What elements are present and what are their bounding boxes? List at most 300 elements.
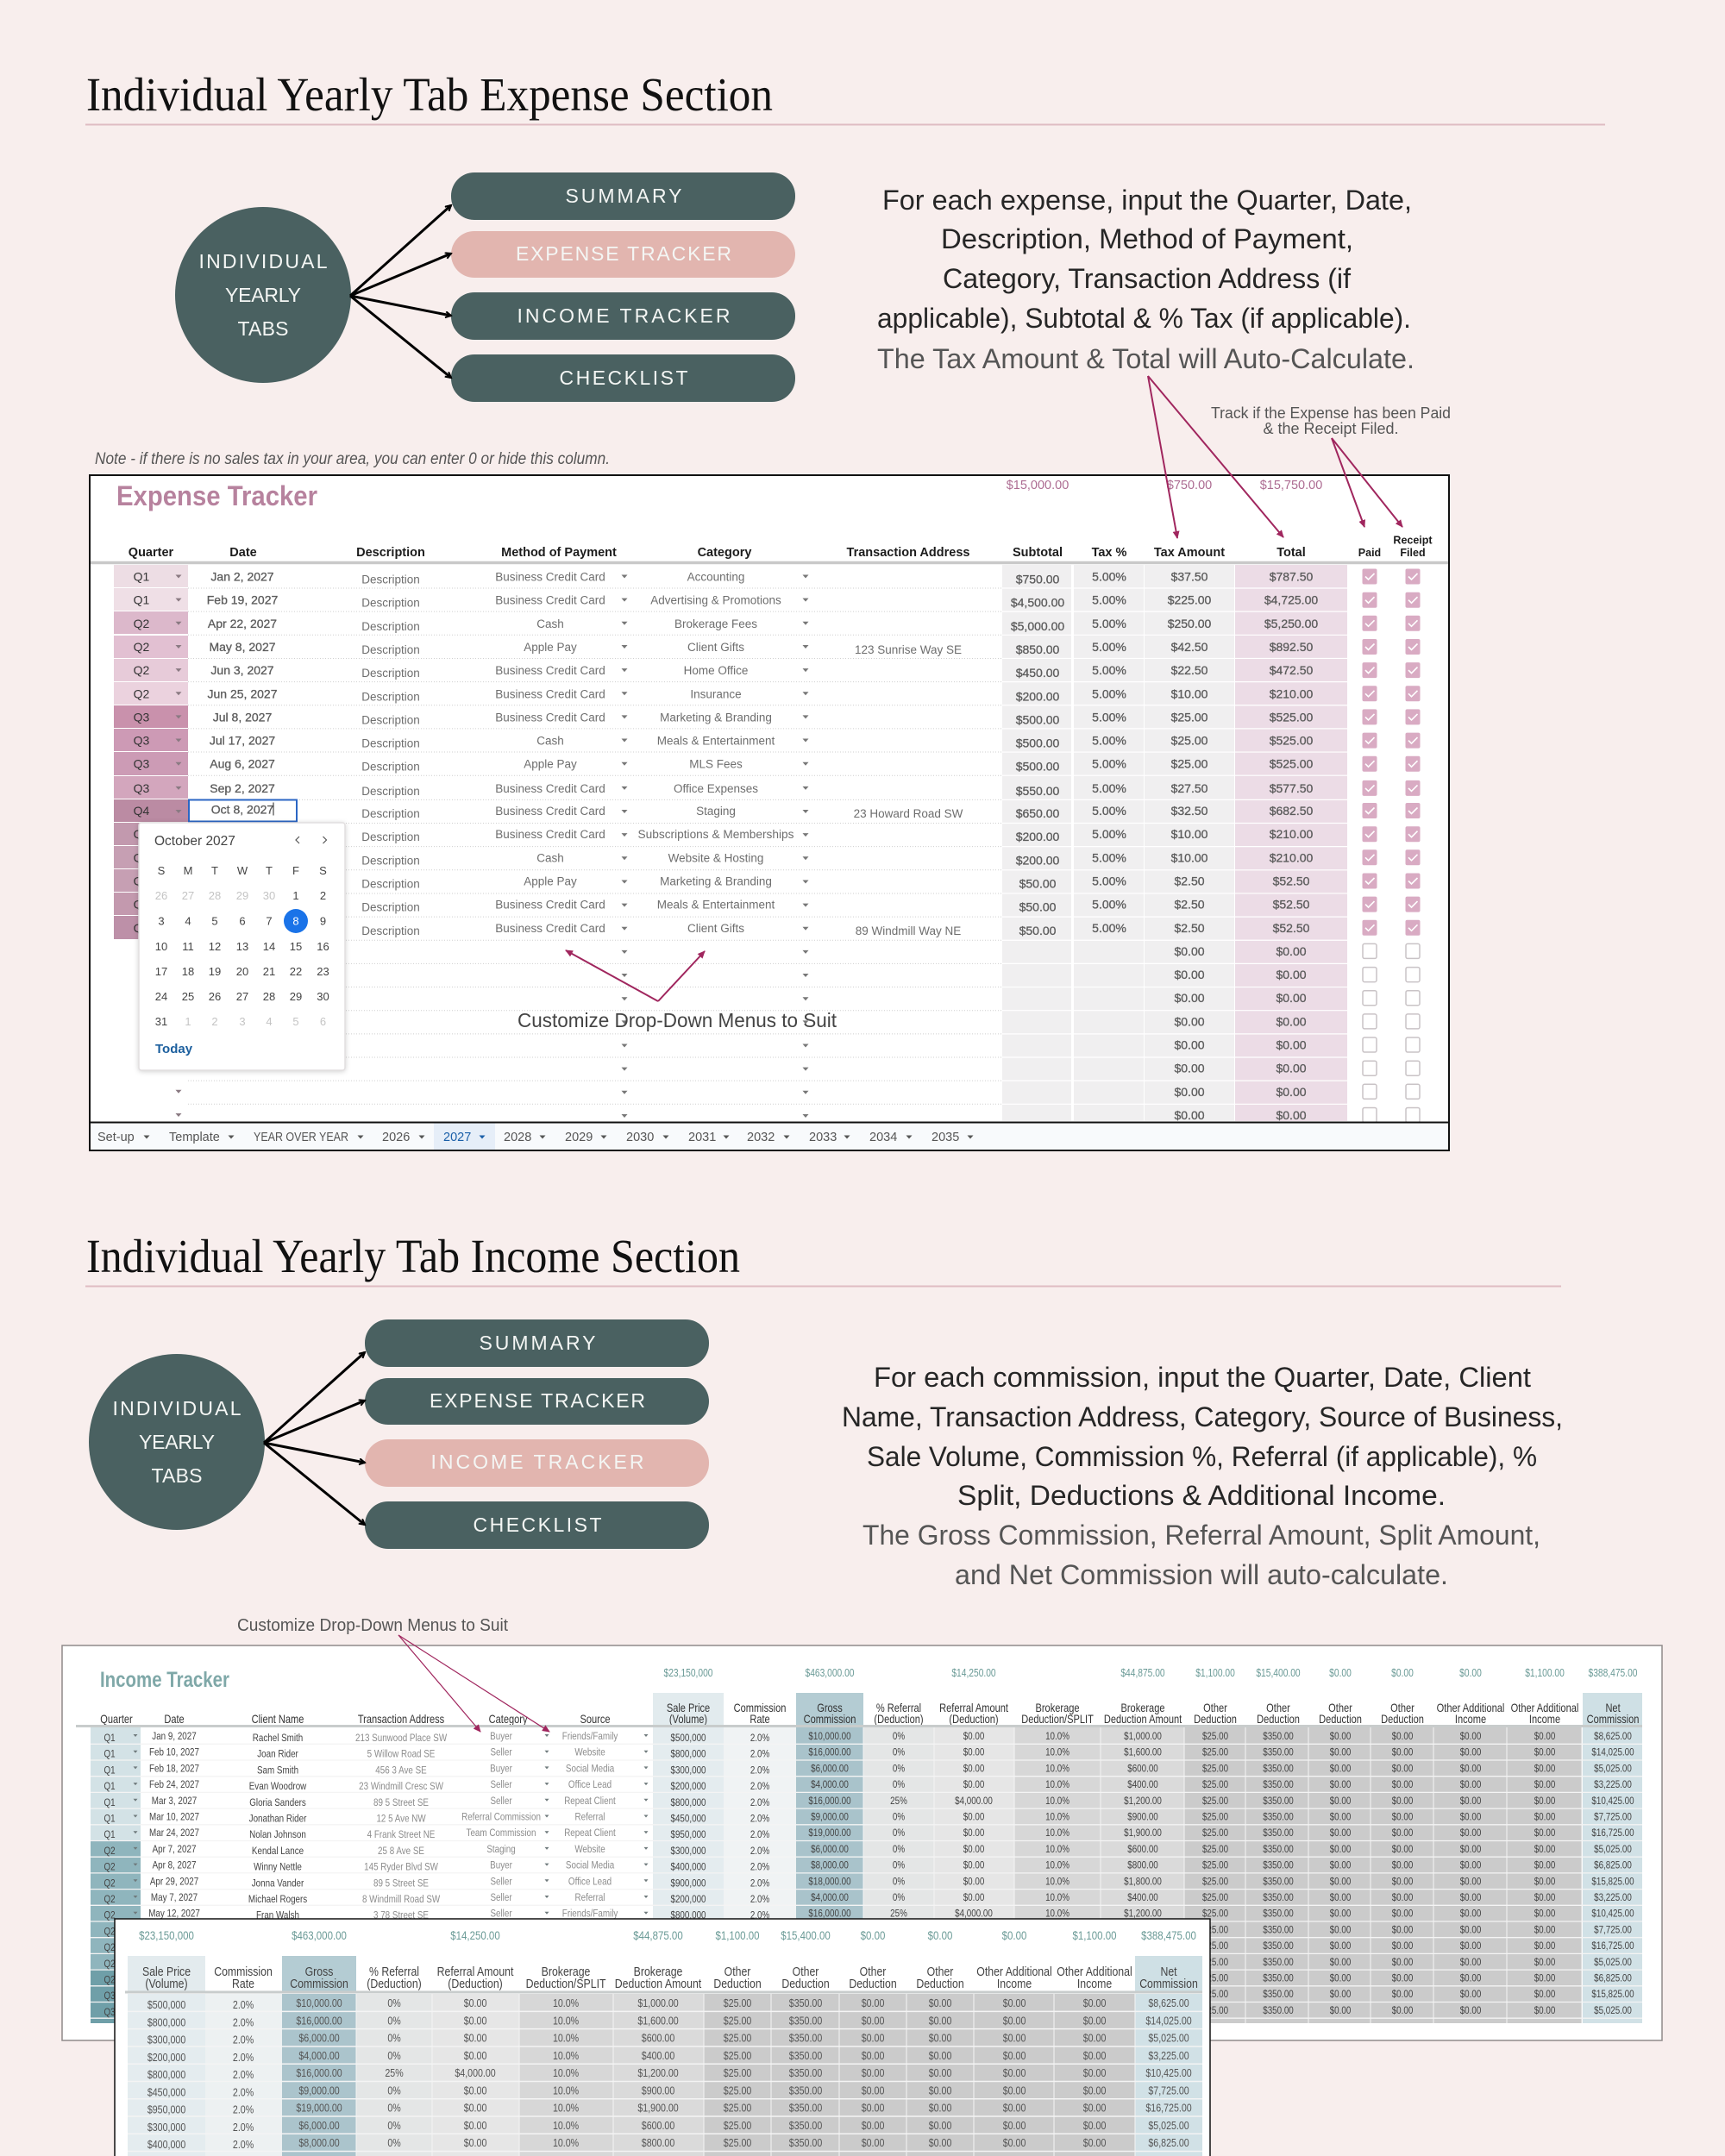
title: expense tracker: Expense Tracker <box>116 480 317 511</box>
column: other deduction 4: $0.00 <box>929 2014 952 2028</box>
header row: Subtotal <box>1013 546 1063 560</box>
column: net commission: $10,425.00 <box>1591 1796 1634 1807</box>
column: other deduction 2: $350.00 <box>1263 1973 1294 1984</box>
column: tax percent: 5.00% <box>1092 663 1126 677</box>
column: sale price: $500,000 <box>670 1733 706 1744</box>
column: other deduction 3: $0.00 <box>1330 1940 1351 1952</box>
totals row: $15,400.00 <box>781 1928 831 1942</box>
column: commission rate <box>233 1998 254 2151</box>
column: brokerage deduction amount: $400.00 <box>642 2049 675 2062</box>
column: other additional income 1: $0.00 <box>1003 2102 1026 2115</box>
column: other deduction 2: $350.00 <box>1263 1892 1294 1903</box>
column: quarter: Q4 <box>134 898 150 912</box>
column: transaction address: 456 3 Ave SE <box>375 1765 427 1777</box>
column: category: Subscriptions & Memberships <box>638 828 794 841</box>
column: gross commission: $16,000.00 <box>808 1747 851 1758</box>
column: transaction address: 89 5 Street SE <box>373 1877 429 1890</box>
column: total: $0.00 <box>1276 968 1307 981</box>
column: referral amount: $4,000.00 <box>955 1908 993 1920</box>
header row: Brokerage <box>634 1965 683 1978</box>
column: total: $4,725.00 <box>1264 593 1318 607</box>
column: referral amount: $0.00 <box>464 2031 487 2045</box>
column: total: $0.00 <box>1276 991 1307 1005</box>
header row: Other <box>927 1965 954 1978</box>
column: category: Seller <box>490 1892 512 1903</box>
header row: Net <box>1605 1702 1621 1714</box>
column: referral amount: $0.00 <box>963 1827 984 1839</box>
column: other deduction 3: $0.00 <box>1330 1908 1351 1920</box>
column: brokerage deduction amount: $800.00 <box>642 2136 675 2149</box>
tab bar: Template <box>169 1131 220 1144</box>
heading: income section: Individual Yearly Tab Income Section <box>86 1230 740 1282</box>
column: method of payment: Business Credit Card <box>495 664 605 677</box>
date picker calendar: F <box>292 864 299 877</box>
column: commission rate: 2.0% <box>750 1814 769 1825</box>
column: tax percent: 5.00% <box>1092 640 1126 654</box>
totals row: $0.00 <box>1391 1668 1414 1679</box>
column: total: $525.00 <box>1270 710 1314 724</box>
column: date: Jun 3, 2027 <box>210 663 274 677</box>
column: percent referral: 25% <box>890 1908 907 1920</box>
column: source <box>562 1731 618 1920</box>
column: other deduction 1: $25.00 <box>1202 1940 1228 1952</box>
header row: Income <box>1455 1713 1486 1726</box>
column: other deduction 4: $0.00 <box>1392 1940 1413 1952</box>
column: percent referral: 0% <box>893 1779 905 1790</box>
header row: Rate <box>750 1713 770 1726</box>
column: date: Apr 8, 2027 <box>153 1860 196 1871</box>
column: other deduction 4: $0.00 <box>1392 1892 1413 1903</box>
column: quarter: Q1 <box>104 1829 116 1840</box>
column: net commission: $6,825.00 <box>1148 2136 1189 2149</box>
column: transaction address: 89 5 Street SE <box>373 1797 429 1808</box>
header row: Gross <box>305 1965 334 1978</box>
column: total: $0.00 <box>1276 1038 1307 1052</box>
column: sale price <box>147 1998 186 2151</box>
column: source: Friends/Family <box>562 1908 618 1920</box>
column: other deduction 3: $0.00 <box>1330 1731 1351 1742</box>
column: sale price: $200,000 <box>670 1781 706 1792</box>
column: brokerage split: 10.0% <box>1045 1908 1070 1920</box>
date picker calendar: 3 <box>239 1015 246 1028</box>
column: other deduction 3: $0.00 <box>862 2102 885 2115</box>
column: sale price: $400,000 <box>670 1862 706 1873</box>
column: other additional income 2: $0.00 <box>1534 1731 1555 1742</box>
date picker calendar: T <box>211 864 218 877</box>
column: other additional income 1: $0.00 <box>1460 1925 1481 1936</box>
header row: Other Additional <box>1437 1702 1504 1714</box>
column: other deduction 4: $0.00 <box>1392 1812 1413 1823</box>
column: date: Feb 24, 2027 <box>149 1779 199 1790</box>
column: method of payment: Business Credit Card <box>495 594 605 607</box>
date picker calendar: 18 <box>182 965 194 978</box>
column: tax percent: 5.00% <box>1092 593 1126 607</box>
column: percent referral: 0% <box>893 1892 905 1903</box>
text block: income instructions: Split, Deductions & Additional Income. <box>957 1480 1446 1511</box>
column: other deduction 2: $350.00 <box>1263 1957 1294 1968</box>
header row: (Volume) <box>669 1713 707 1726</box>
column: other additional income 2: $0.00 <box>1534 1764 1555 1775</box>
column: brokerage deduction amount <box>637 1996 679 2149</box>
column: percent referral: 0% <box>893 1812 905 1823</box>
column: other deduction 3: $0.00 <box>862 2136 885 2149</box>
column: method of payment: Business Credit Card <box>495 711 605 724</box>
date picker calendar: 29 <box>290 990 302 1003</box>
column: date: Sep 2, 2027 <box>210 781 275 795</box>
column: commission rate: 2.0% <box>233 2085 254 2099</box>
tab bar: 2034 <box>869 1131 897 1144</box>
column: description: Description <box>361 737 420 750</box>
column: sale price: $800,000 <box>670 1910 706 1921</box>
header row: Income <box>1077 1977 1113 1990</box>
column: total: $210.00 <box>1270 827 1314 841</box>
column: percent referral: 0% <box>893 1764 905 1775</box>
column: description: Description <box>361 643 420 656</box>
header row: Tax Amount <box>1154 546 1225 560</box>
column backgrounds <box>128 1956 1202 2156</box>
totals row: $463,000.00 <box>292 1928 347 1942</box>
column: quarter: Q1 <box>104 1749 116 1760</box>
column: brokerage deduction amount: $1,200.00 <box>1124 1796 1162 1807</box>
column: category: Insurance <box>690 687 742 700</box>
column: referral amount: $0.00 <box>464 2119 487 2132</box>
column: date: Jan 2, 2027 <box>210 569 274 583</box>
title: income tracker: Income Tracker <box>100 1668 229 1692</box>
column: net commission: $7,725.00 <box>1594 1925 1632 1936</box>
column: client name: Nolan Johnson <box>249 1829 306 1840</box>
column: other deduction 3: $0.00 <box>1330 1989 1351 2000</box>
column: net commission: $8,625.00 <box>1148 1996 1189 2009</box>
date picker calendar: 7 <box>266 914 273 928</box>
column: sale price: $300,000 <box>147 2121 186 2134</box>
column: method of payment: Business Credit Card <box>495 782 605 795</box>
column: percent referral: 0% <box>387 2136 401 2149</box>
date picker calendar: 16 <box>317 940 329 953</box>
column: date: Jun 25, 2027 <box>208 686 278 700</box>
column: other additional income 2: $0.00 <box>1534 1747 1555 1758</box>
column: other deduction 1: $25.00 <box>724 1996 752 2009</box>
column: sale price: $300,000 <box>670 1846 706 1857</box>
column: net commission: $8,625.00 <box>1594 1731 1632 1742</box>
totals row <box>1007 479 1322 492</box>
column: referral amount: $0.00 <box>963 1876 984 1888</box>
column: other deduction 3: $0.00 <box>862 2049 885 2062</box>
totals row <box>139 1928 1196 1942</box>
column: brokerage deduction amount: $400.00 <box>1127 1892 1158 1903</box>
column: other additional income 2: $0.00 <box>1083 2119 1107 2132</box>
column: client name: Fran Walsh <box>256 1910 299 1921</box>
date picker calendar: 6 <box>320 1015 326 1028</box>
column: tax amount: $25.00 <box>1171 757 1208 771</box>
column: percent referral: 0% <box>893 1876 905 1888</box>
column: method of payment: Business Credit Card <box>495 922 605 935</box>
column: commission rate: 2.0% <box>750 1781 769 1792</box>
tab bar <box>91 1123 1448 1150</box>
column: quarter: Q2 <box>104 1959 116 1970</box>
column: method of payment: Business Credit Card <box>495 828 605 841</box>
callout: paid and receipt <box>1211 404 1451 437</box>
tab bar: 2027 <box>443 1131 471 1144</box>
column: other deduction 1: $25.00 <box>1202 1860 1228 1871</box>
date picker calendar: 29 <box>236 889 248 902</box>
column: other deduction 3: $0.00 <box>1330 1764 1351 1775</box>
column: brokerage deduction amount: $1,600.00 <box>1124 1747 1162 1758</box>
column: other additional income 2 <box>1534 1731 1555 2016</box>
column: other additional income 1: $0.00 <box>1460 1957 1481 1968</box>
column: tax amount: $25.00 <box>1171 734 1208 748</box>
column: total: $0.00 <box>1276 1062 1307 1075</box>
column: other deduction 2 <box>1263 1731 1294 2016</box>
column: other deduction 1: $25.00 <box>1202 1989 1228 2000</box>
column: other deduction 4 <box>1392 1731 1413 2016</box>
column: other additional income 1: $0.00 <box>1460 1764 1481 1775</box>
tab bar: 2029 <box>565 1131 593 1144</box>
column: tax amount: $0.00 <box>1174 1038 1205 1052</box>
column: subtotal: $850.00 <box>1016 642 1060 656</box>
column: description: Description <box>361 690 420 703</box>
text block: expense instructions: applicable), Subtotal & % Tax (if applicable). <box>877 303 1411 334</box>
column: description: Description <box>361 761 420 774</box>
column: total: $472.50 <box>1270 663 1314 677</box>
panel: expense tracker sheet <box>90 475 1449 1150</box>
date picker calendar: 10 <box>155 940 167 953</box>
column: client name: Winny Nettle <box>254 1862 302 1873</box>
column: gross commission: $16,000.00 <box>296 2066 342 2079</box>
header row: Other <box>1390 1702 1414 1714</box>
column: other deduction 1: $25.00 <box>1202 1844 1228 1855</box>
column: percent referral: 0% <box>387 2084 401 2097</box>
date picker calendar: 2 <box>211 1015 218 1028</box>
column: brokerage deduction amount: $1,600.00 <box>637 2014 679 2028</box>
column: date: May 7, 2027 <box>151 1892 198 1903</box>
column: net commission: $15,825.00 <box>1591 1876 1634 1888</box>
column: other deduction 1: $25.00 <box>1202 1764 1228 1775</box>
column: description: Description <box>361 785 420 798</box>
date picker calendar: 26 <box>155 889 167 902</box>
text block: income instructions: The Gross Commission, Referral Amount, Split Amount, <box>862 1520 1540 1551</box>
column: brokerage deduction amount: $600.00 <box>1127 1764 1158 1775</box>
column: method of payment: Apple Pay <box>524 641 577 654</box>
column: brokerage split: 10.0% <box>553 1996 580 2009</box>
column: referral amount: $0.00 <box>963 1731 984 1742</box>
column: other additional income 1: $0.00 <box>1003 1996 1026 2009</box>
column: tax percent: 5.00% <box>1092 804 1126 818</box>
column: tax amount: $10.00 <box>1171 686 1208 700</box>
selected date cell <box>189 800 297 821</box>
column: other deduction 4: $0.00 <box>929 1996 952 2009</box>
column: brokerage deduction amount: $400.00 <box>1127 1779 1158 1790</box>
column: commission rate: 2.0% <box>750 1749 769 1760</box>
column: other deduction 2: $350.00 <box>789 2014 823 2028</box>
column: gross commission: $4,000.00 <box>811 1779 849 1790</box>
column: gross commission: $16,000.00 <box>808 1908 851 1920</box>
column: brokerage deduction amount: $600.00 <box>642 2031 675 2045</box>
column: description: Description <box>361 901 420 914</box>
column: other additional income 2: $0.00 <box>1083 2102 1107 2115</box>
panel: income tracker zoomed inset <box>115 1919 1210 2156</box>
column: gross commission: $6,000.00 <box>298 2031 340 2045</box>
header row: Description <box>356 546 425 560</box>
column: category: Referral Commission <box>461 1812 541 1823</box>
column: other deduction 3: $0.00 <box>1330 1779 1351 1790</box>
column: other additional income 2: $0.00 <box>1534 1940 1555 1952</box>
header row: Commission <box>1139 1977 1198 1990</box>
date picker calendar: 28 <box>263 990 275 1003</box>
column: gross commission: $18,000.00 <box>808 1876 851 1888</box>
column: total: $577.50 <box>1270 781 1314 795</box>
column: category: Staging <box>486 1844 516 1855</box>
column: brokerage split: 10.0% <box>553 2066 580 2079</box>
header row: Other <box>860 1965 887 1978</box>
column: other additional income 2: $0.00 <box>1083 2136 1107 2149</box>
column: other deduction 2: $350.00 <box>789 2049 823 2062</box>
header row: Commission <box>734 1702 787 1714</box>
column: quarter: Q1 <box>134 569 150 583</box>
column: total <box>1264 569 1318 1122</box>
header row: Commission <box>214 1965 273 1978</box>
column: other deduction 1: $25.00 <box>1202 1747 1228 1758</box>
header row: Deduction <box>1194 1713 1237 1726</box>
column: other deduction 3: $0.00 <box>862 2066 885 2079</box>
totals row: $1,100.00 <box>1072 1928 1117 1942</box>
circle: individual yearly tabs: INDIVIDUAL <box>198 250 328 273</box>
column: other deduction 4: $0.00 <box>929 2136 952 2149</box>
date picker calendar: S <box>319 864 327 877</box>
column: tax amount: $27.50 <box>1171 781 1208 795</box>
totals row: $0.00 <box>1459 1668 1482 1679</box>
column: other deduction 3: $0.00 <box>1330 1973 1351 1984</box>
column: tax amount: $10.00 <box>1171 827 1208 841</box>
arrows: circle to pills <box>350 205 451 378</box>
circle: individual yearly tabs <box>175 207 351 383</box>
column: other additional income 2: $0.00 <box>1534 2005 1555 2016</box>
totals row: $750.00 <box>1167 479 1212 492</box>
column: gross commission: $6,000.00 <box>811 1764 849 1775</box>
column: client name: Kendal Lance <box>252 1846 304 1857</box>
column: net commission: $3,225.00 <box>1594 1779 1632 1790</box>
column: other additional income 1: $0.00 <box>1460 1876 1481 1888</box>
column: tax amount: $0.00 <box>1174 968 1205 981</box>
column: quarter: Q2 <box>104 1975 116 1986</box>
column: category: Website & Hosting <box>668 851 763 864</box>
header row: Other <box>1266 1702 1290 1714</box>
column: other additional income 1: $0.00 <box>1003 2049 1026 2062</box>
column: percent referral: 0% <box>893 1827 905 1839</box>
header row: Method of Payment <box>501 546 617 560</box>
header row: (Deduction) <box>949 1713 999 1726</box>
column: brokerage split: 10.0% <box>553 2014 580 2028</box>
column: commission rate: 2.0% <box>233 1998 254 2011</box>
column: brokerage deduction amount: $800.00 <box>1127 1860 1158 1871</box>
column: transaction address <box>854 643 963 937</box>
column: sale price: $450,000 <box>147 2085 186 2099</box>
column: percent referral: 25% <box>385 2066 404 2079</box>
column: gross commission: $9,000.00 <box>811 1812 849 1823</box>
column: other deduction 2: $350.00 <box>1263 1731 1294 1742</box>
text block: income instructions: and Net Commission will auto-calculate. <box>955 1559 1448 1590</box>
column: sale price: $900,000 <box>670 1877 706 1890</box>
column: other additional income 1: $0.00 <box>1460 1892 1481 1903</box>
callout: customize dropdown menus (income): Customize Drop-Down Menus to Suit <box>237 1616 508 1635</box>
column: percent referral: 0% <box>387 2049 401 2062</box>
column: subtotal: $500.00 <box>1016 712 1060 726</box>
column: other additional income 1: $0.00 <box>1460 1973 1481 1984</box>
totals row <box>664 1668 1637 1679</box>
column: tax amount: $10.00 <box>1171 850 1208 864</box>
column backgrounds <box>1002 565 1347 1121</box>
column: brokerage deduction amount: $1,800.00 <box>1124 1876 1162 1888</box>
column: source: Website <box>574 1844 605 1855</box>
column: other deduction 2 <box>789 1996 823 2149</box>
column: other deduction 4: $0.00 <box>1392 1747 1413 1758</box>
column: other deduction 4: $0.00 <box>929 2031 952 2045</box>
date picker calendar: 9 <box>320 914 326 928</box>
column: commission rate: 2.0% <box>233 2051 254 2064</box>
column: commission rate: 2.0% <box>750 1862 769 1873</box>
column: category: Marketing & Branding <box>660 711 772 724</box>
note: sales tax: Note - if there is no sales tax in your area, you can enter 0 or hide this column. <box>95 450 610 468</box>
tab bar: 2035 <box>932 1131 959 1144</box>
column: quarter: Q4 <box>134 804 150 818</box>
column: gross commission: $10,000.00 <box>296 1996 342 2009</box>
header row: Brokerage <box>1036 1702 1080 1714</box>
pills: tab names: EXPENSE TRACKER <box>516 242 731 265</box>
callout: paid and receipt: Track if the Expense has been Paid <box>1211 404 1451 422</box>
column: other deduction 4: $0.00 <box>1392 1827 1413 1839</box>
column: quarter: Q3 <box>134 734 150 748</box>
header row: (Deduction) <box>874 1713 924 1726</box>
column: total: $0.00 <box>1276 1108 1307 1122</box>
column: client name: Gloria Sanders <box>249 1797 306 1808</box>
diagram: yearly tabs, income highlighted <box>89 1319 709 1549</box>
header row: Transaction Address <box>847 546 969 560</box>
column: date <box>207 569 278 795</box>
column: referral amount: $0.00 <box>963 1860 984 1871</box>
column: other deduction 1: $25.00 <box>724 2084 752 2097</box>
column: other deduction 1 <box>1202 1731 1228 2016</box>
column: percent referral: 0% <box>893 1860 905 1871</box>
date picker calendar: 5 <box>211 914 218 928</box>
column: brokerage split: 10.0% <box>1045 1860 1070 1871</box>
column: source: Referral <box>575 1892 605 1903</box>
column: quarter: Q2 <box>134 663 150 677</box>
header row: Deduction <box>1381 1713 1424 1726</box>
column: date <box>148 1731 200 1920</box>
totals row: $44,875.00 <box>1120 1668 1165 1679</box>
column: other deduction 1: $25.00 <box>724 2119 752 2132</box>
column: tax amount: $0.00 <box>1174 1014 1205 1028</box>
column: source: Office Lead <box>568 1779 612 1790</box>
column: brokerage deduction amount: $600.00 <box>642 2119 675 2132</box>
column: other additional income 2: $0.00 <box>1083 2014 1107 2028</box>
column: other deduction 2: $350.00 <box>1263 1989 1294 2000</box>
column: net commission: $16,725.00 <box>1591 1827 1634 1839</box>
column: tax amount: $22.50 <box>1171 663 1208 677</box>
column: quarter: Q1 <box>104 1781 116 1792</box>
selected date cell: Oct 8, 2027 <box>211 802 273 816</box>
column: category: Brokerage Fees <box>674 617 757 630</box>
column: commission rate: 2.0% <box>750 1894 769 1905</box>
column: category: Marketing & Branding <box>660 874 772 888</box>
column: category: Buyer <box>490 1764 512 1775</box>
column: paid checkboxes <box>1363 569 1377 1123</box>
column: brokerage deduction amount: $1,900.00 <box>637 2102 679 2115</box>
header row: Deduction <box>1319 1713 1362 1726</box>
column: other deduction 4: $0.00 <box>1392 1796 1413 1807</box>
column: method of payment: Apple Pay <box>524 874 577 888</box>
arrows: dropdown menus <box>566 950 705 1001</box>
column: other deduction 2: $350.00 <box>1263 1779 1294 1790</box>
